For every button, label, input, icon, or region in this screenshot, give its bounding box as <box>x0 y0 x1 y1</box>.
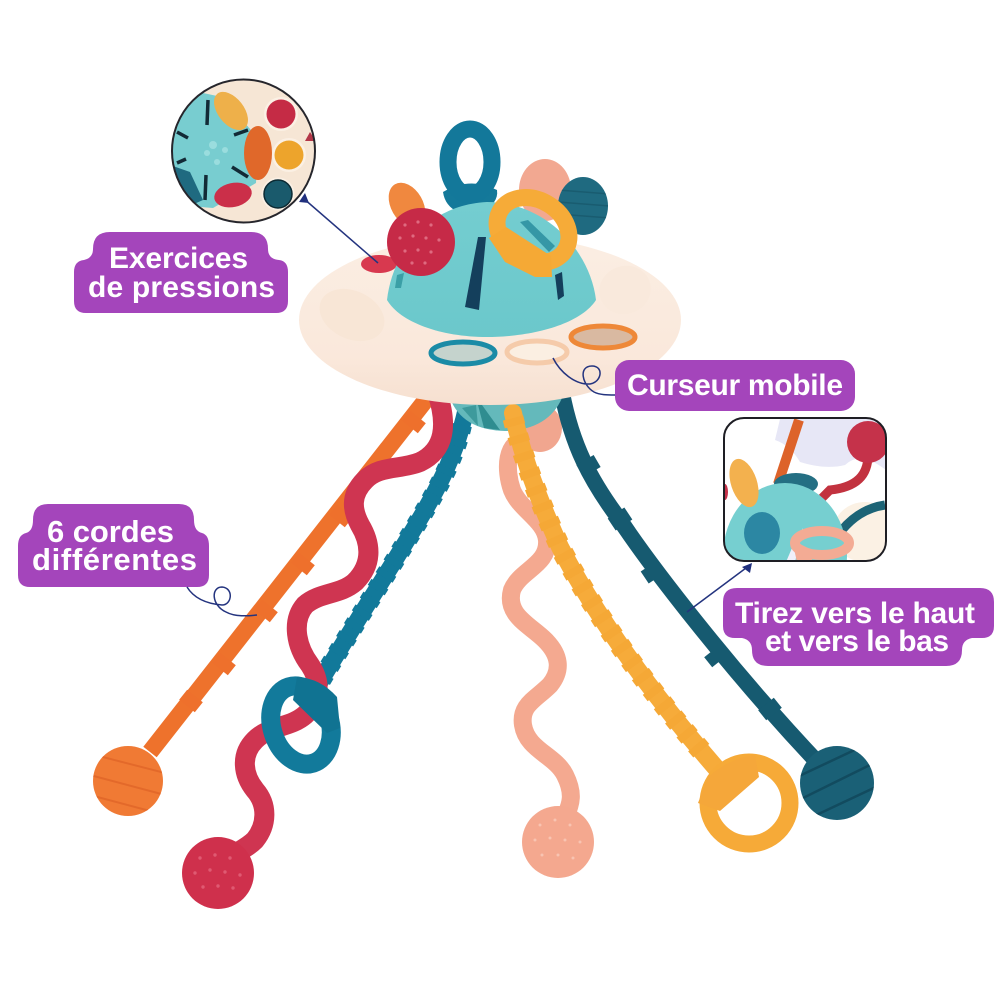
disc body <box>299 235 681 405</box>
rope: teal ribbed <box>320 400 468 682</box>
red press disc <box>387 208 455 276</box>
rope: navy <box>562 393 880 820</box>
label bubble <box>723 588 994 666</box>
rope: red wavy <box>182 392 443 909</box>
dome <box>387 202 596 337</box>
inset: top view circle <box>168 80 316 222</box>
slider: orange ring <box>571 326 635 348</box>
toy: ropes and body <box>90 129 880 909</box>
yellow ring on rope <box>698 755 790 844</box>
label text line 2: et vers le bas <box>765 625 949 658</box>
label text: 6 cordes <box>47 514 174 549</box>
label text: Exercices <box>109 242 248 275</box>
label bubble <box>615 360 855 411</box>
yellow ring on dome <box>485 184 581 277</box>
rope: yellow ribbed <box>513 413 716 768</box>
callout: Tirez vers le haut et vers le bas <box>723 588 994 666</box>
label text line 2: différentes <box>32 542 197 577</box>
label text: Tirez vers le haut <box>735 597 975 630</box>
slider: pale ring <box>507 341 567 363</box>
hole: red press hole <box>361 255 397 273</box>
teal ring on rope <box>261 677 341 772</box>
label bubble <box>74 232 288 313</box>
lower sphere <box>450 398 562 431</box>
label text: Curseur mobile <box>627 369 843 402</box>
callout: 6 cordes différentes <box>18 504 209 587</box>
callout: Curseur mobile <box>615 360 855 411</box>
slider: teal ring <box>431 342 495 364</box>
connector: rope curl <box>187 587 257 616</box>
inset: pull detail photo <box>723 417 887 562</box>
label bubble <box>18 504 209 587</box>
arrow: navy rope to inset <box>687 563 752 612</box>
top pegs behind dome <box>381 129 610 235</box>
rope: salmon wavy <box>508 404 594 878</box>
label text line 2: de pressions <box>88 271 275 304</box>
rope: orange <box>90 392 432 816</box>
arrow: circle inset to press hole <box>299 193 378 263</box>
connector: slider curl <box>553 358 615 395</box>
callout: Exercices de pressions <box>74 232 288 313</box>
